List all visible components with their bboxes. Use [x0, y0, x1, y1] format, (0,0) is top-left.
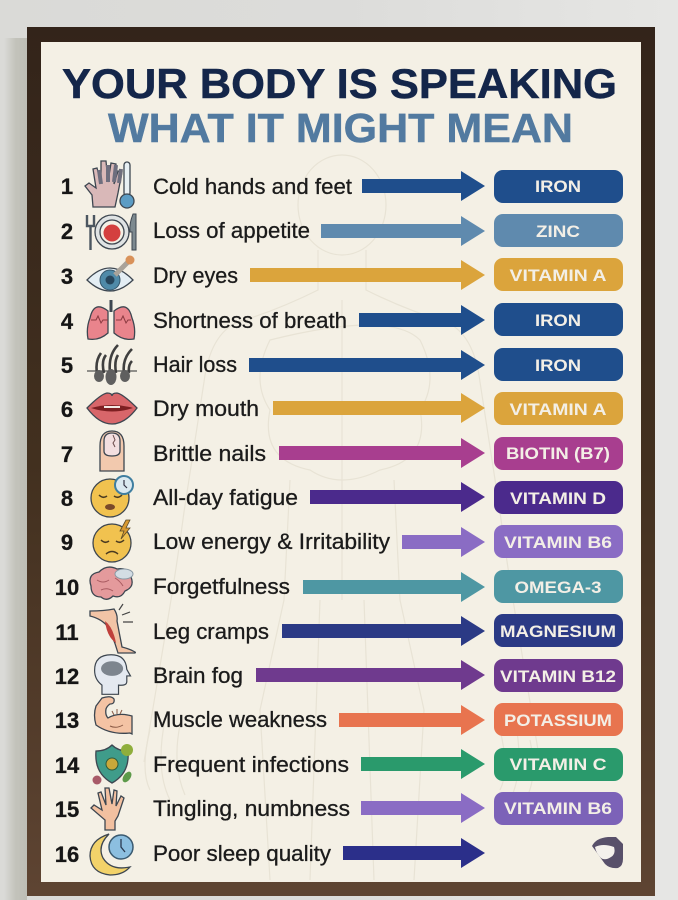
icon: lungs	[87, 300, 135, 339]
nutrient pill	[494, 348, 623, 381]
number: 3	[61, 264, 73, 289]
row 12: brain fog	[55, 655, 623, 694]
arrow	[273, 393, 485, 423]
symptom label: Brain fog	[153, 663, 243, 688]
nutrient pill	[494, 170, 623, 203]
nutrient pill: VITAMIN A	[510, 401, 607, 419]
nutrient pill: BIOTIN (B7)	[506, 445, 610, 463]
nutrient pill: ZINC	[536, 223, 580, 241]
nutrient pill: VITAMIN B12	[500, 668, 616, 686]
row 15: tingling, numbness	[55, 788, 623, 830]
icon: shield and germs	[92, 744, 133, 784]
title line 2: WHAT IT MIGHT MEAN	[108, 105, 573, 151]
arrow	[256, 660, 485, 690]
symptom label: All-day fatigue	[153, 485, 298, 510]
logo badge	[592, 837, 623, 868]
number: 9	[61, 530, 73, 555]
row 8: all-day fatigue	[61, 476, 623, 517]
symptom label: Cold hands and feet	[153, 174, 352, 199]
number: 5	[61, 353, 73, 378]
arrow	[250, 260, 485, 290]
number: 1	[61, 174, 73, 199]
nutrient pill	[494, 570, 623, 603]
row 14: frequent infections	[55, 744, 623, 784]
nutrient pill: IRON	[535, 178, 581, 196]
nutrient pill: MAGNESIUM	[500, 623, 616, 641]
nutrient pill	[494, 748, 623, 781]
nutrient pill: VITAMIN D	[510, 490, 606, 508]
row 2: loss of appetite	[61, 214, 623, 250]
icon: brain with cloud	[90, 567, 133, 599]
icon: moon and clock	[90, 834, 133, 875]
number: 15	[55, 797, 79, 822]
nutrient pill: VITAMIN B6	[504, 800, 612, 818]
arrow	[361, 793, 485, 823]
nutrient pill	[494, 214, 623, 247]
arrow	[402, 527, 485, 557]
arrow	[362, 171, 485, 201]
nutrient pill	[494, 703, 623, 736]
row 6: dry mouth	[61, 392, 623, 425]
icon: tingling hand	[91, 788, 124, 830]
symptom label: Poor sleep quality	[153, 841, 331, 866]
number: 6	[61, 397, 73, 422]
number: 10	[55, 575, 79, 600]
arrow	[279, 438, 485, 468]
icon: plate with apple	[87, 214, 136, 250]
row 16: poor sleep quality	[55, 834, 485, 875]
nutrient pill	[494, 659, 623, 692]
nutrient pill	[494, 525, 623, 558]
symptom label: Dry mouth	[153, 396, 259, 421]
arrow	[249, 350, 485, 380]
icon: fingernail	[100, 431, 124, 471]
row 3: dry eyes	[61, 256, 623, 291]
title line 1: YOUR BODY IS SPEAKING	[62, 60, 617, 107]
icon: leg with cramp	[90, 604, 135, 653]
number: 11	[55, 620, 79, 645]
title	[62, 60, 617, 151]
symptom label: Forgetfulness	[153, 574, 290, 599]
number: 16	[55, 842, 79, 867]
row 4: shortness of breath	[61, 300, 623, 339]
icon: head with fog	[95, 655, 130, 694]
arrow	[361, 749, 485, 779]
icon: face with lightning bolt	[93, 520, 131, 562]
row 13: muscle weakness	[55, 697, 623, 736]
icon: cold hand and thermometer	[85, 161, 134, 208]
arrow	[343, 838, 485, 868]
number: 8	[61, 486, 73, 511]
symptom label: Muscle weakness	[153, 707, 327, 732]
nutrient pill	[494, 392, 623, 425]
number: 13	[55, 708, 79, 733]
nutrient pill: IRON	[535, 312, 581, 330]
nutrient pill: VITAMIN B6	[504, 534, 612, 552]
symptom label: Brittle nails	[153, 441, 266, 466]
symptom label: Loss of appetite	[153, 218, 310, 243]
row 11: leg cramps	[55, 604, 623, 653]
row 1: cold hands and feet	[61, 161, 623, 208]
nutrient pill	[494, 437, 623, 470]
row 7: brittle nails	[61, 431, 623, 471]
icon: flexed arm	[94, 697, 132, 734]
number: 7	[61, 442, 73, 467]
symptom label: Hair loss	[153, 352, 237, 377]
arrow	[310, 482, 485, 512]
number: 12	[55, 664, 79, 689]
nutrient pill: VITAMIN A	[510, 267, 607, 285]
frame shadow on wall	[4, 38, 27, 900]
nutrient pill: OMEGA-3	[514, 579, 602, 597]
nutrient pill: POTASSIUM	[504, 712, 612, 730]
symptom label: Dry eyes	[153, 263, 238, 288]
number: 2	[61, 219, 73, 244]
symptom label: Frequent infections	[153, 752, 349, 777]
arrow	[321, 216, 485, 246]
arrow	[339, 705, 485, 735]
faint anatomy background	[144, 155, 540, 880]
arrow	[303, 572, 485, 602]
nutrient pill	[494, 258, 623, 291]
symptom label: Leg cramps	[153, 619, 269, 644]
icon: eye with dropper	[87, 256, 134, 291]
nutrient pill	[494, 303, 623, 336]
number: 4	[61, 309, 74, 334]
icon: hair follicles	[87, 345, 137, 385]
icon: lips	[87, 393, 137, 424]
arrow	[359, 305, 485, 335]
symptom label: Low energy & Irritability	[153, 529, 390, 554]
row 5: hair loss	[61, 345, 623, 385]
nutrient pill	[494, 481, 623, 514]
symptom label: Tingling, numbness	[153, 796, 350, 821]
nutrient pill	[494, 792, 623, 825]
arrow	[282, 616, 485, 646]
number: 14	[55, 753, 80, 778]
nutrient pill: VITAMIN C	[510, 756, 607, 774]
nutrient pill	[494, 614, 623, 647]
symptom label: Shortness of breath	[153, 308, 347, 333]
icon: tired face with clock	[91, 476, 133, 517]
row 10: forgetfulness	[55, 567, 623, 603]
nutrient pill: IRON	[535, 357, 581, 375]
row 9: low energy and irritability	[61, 520, 623, 562]
